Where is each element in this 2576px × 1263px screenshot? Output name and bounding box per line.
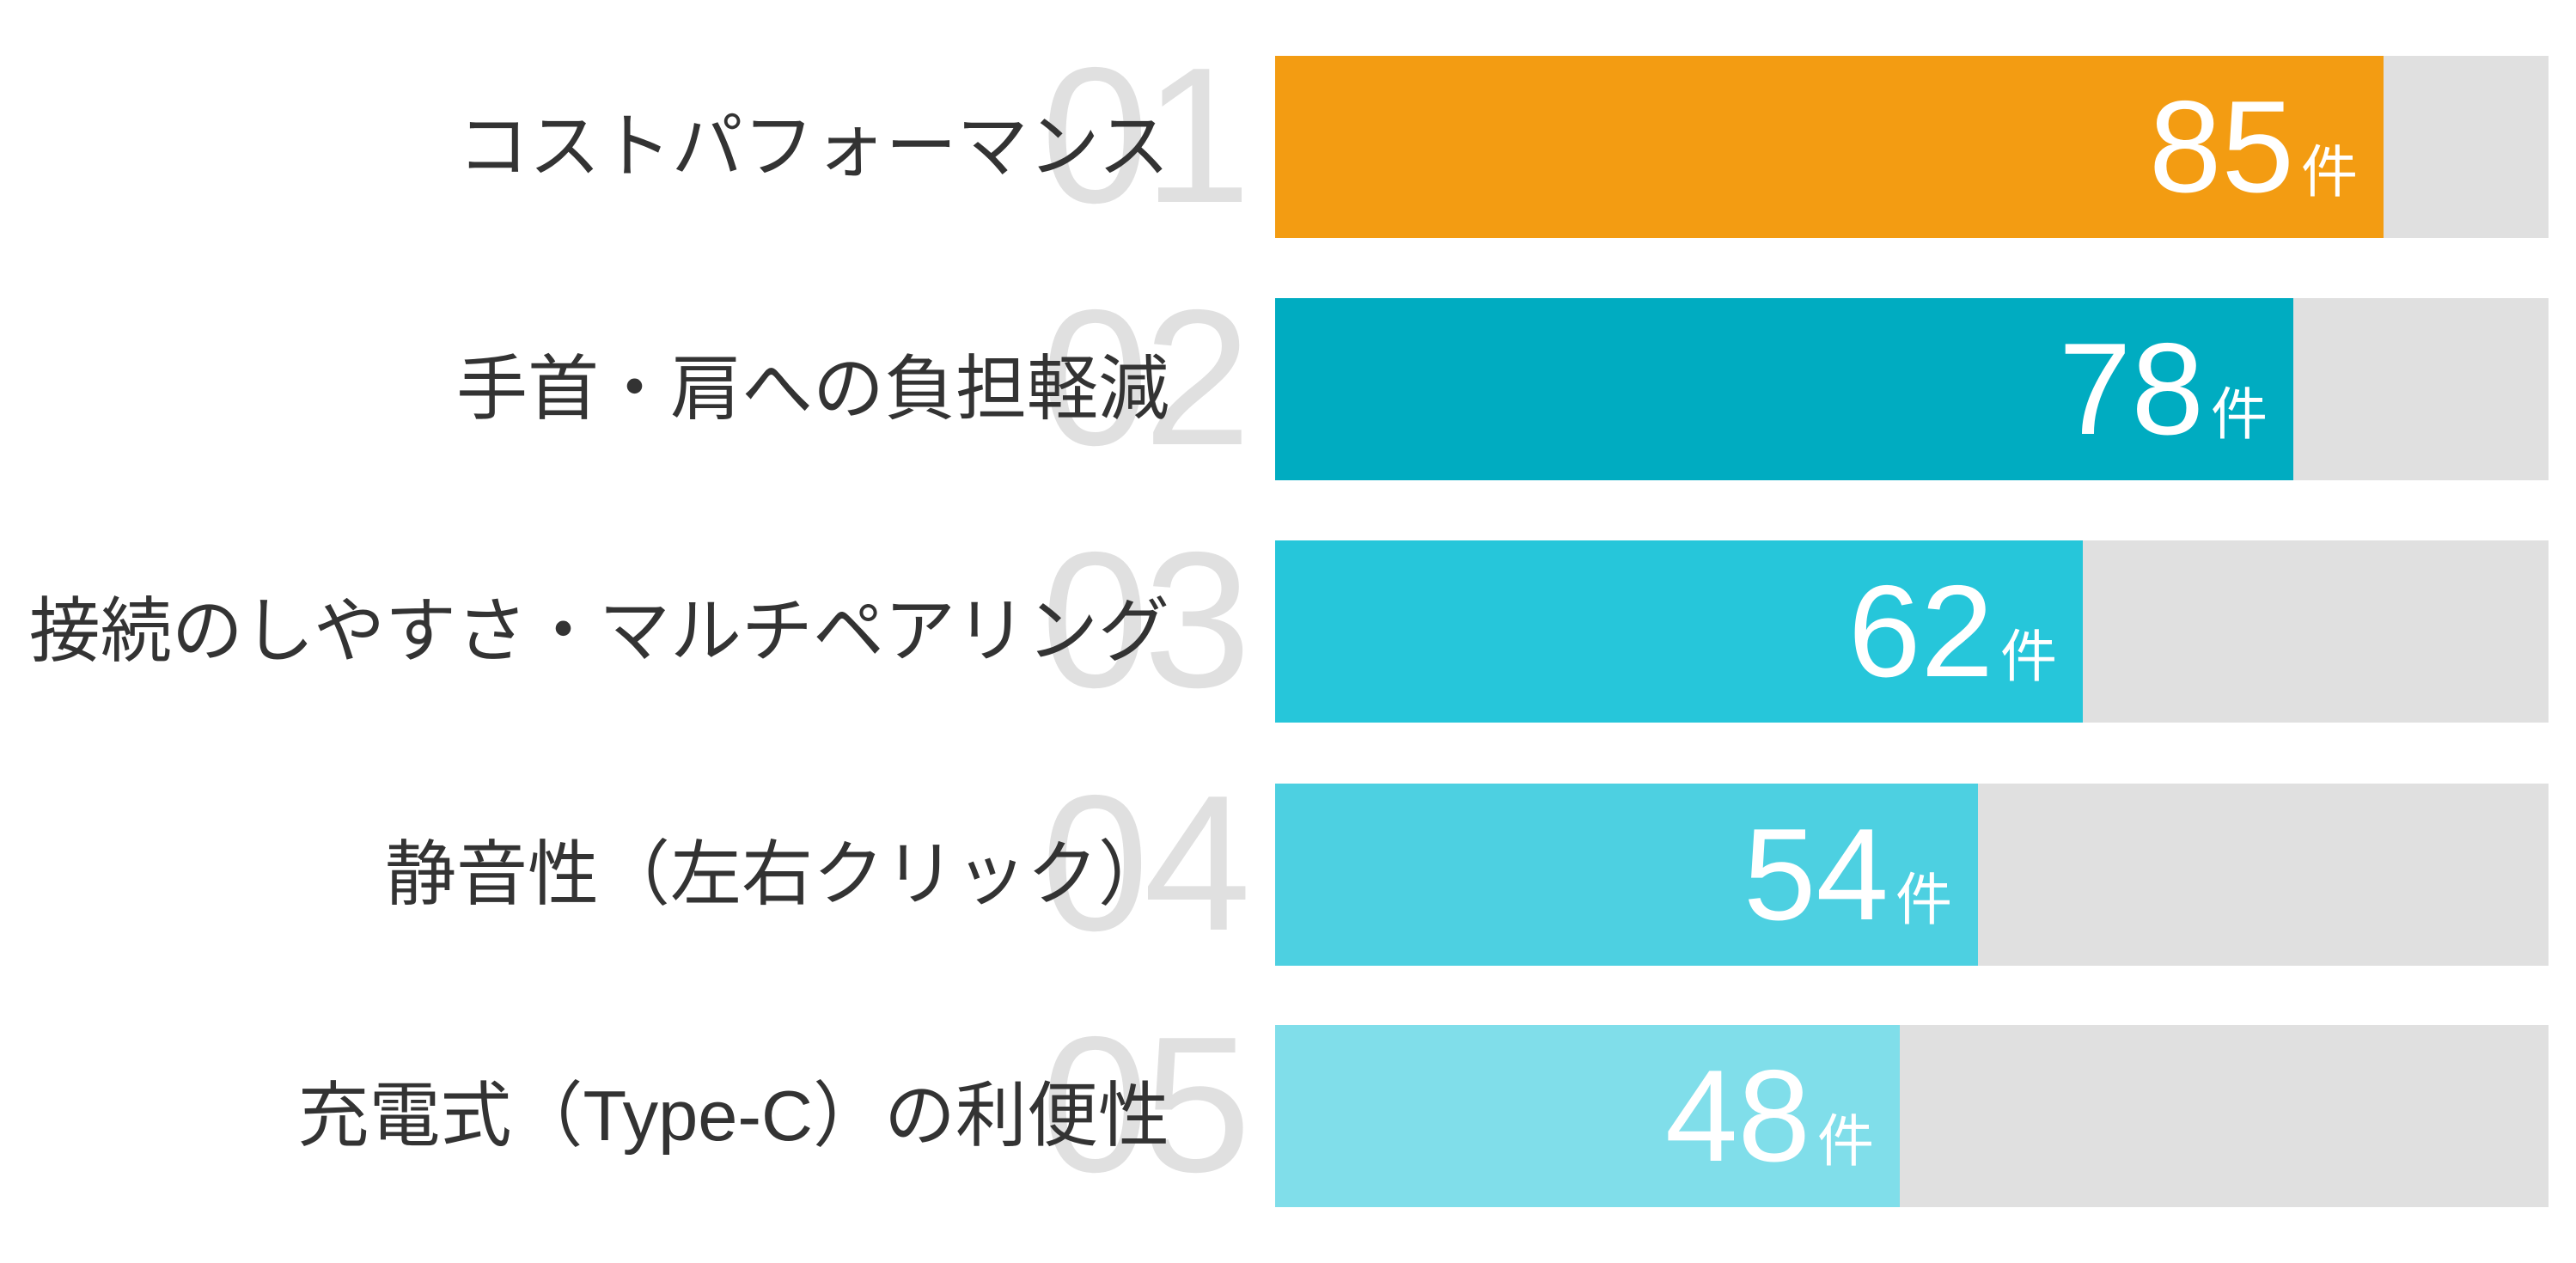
row 3: connectivity — [29, 511, 2549, 728]
bar 54: 54件 — [1743, 802, 1952, 948]
label: 手首・肩への負担軽減 — [456, 349, 1169, 429]
bar 54 — [1275, 784, 2549, 966]
label: 接続のしやすさ・マルチペアリング — [29, 591, 1169, 671]
bar 78 — [1275, 298, 2549, 480]
rank number 01: 01 — [1041, 27, 1246, 243]
label: コストパフォーマンス — [458, 107, 1169, 186]
rank number 04: 04 — [1041, 754, 1246, 971]
bar 62 — [1275, 540, 2549, 723]
row 5: rechargeable — [297, 996, 2549, 1212]
label: 充電式（Type-C）の利便性 — [297, 1076, 1169, 1156]
bar 48: 48件 — [1665, 1043, 1874, 1189]
rank number 02: 02 — [1041, 269, 1246, 485]
row 4: quiet — [385, 754, 2549, 971]
bar 85 — [1275, 56, 2549, 238]
bar 78: 78件 — [2059, 316, 2268, 462]
rank number 03: 03 — [1041, 511, 1246, 728]
bar 48 — [1275, 1025, 2549, 1207]
row 1: cost performance — [458, 27, 2549, 243]
bar 62: 62件 — [1848, 558, 2057, 705]
rank number 05: 05 — [1041, 996, 1246, 1212]
label: 静音性（左右クリック） — [385, 834, 1169, 914]
bar 85: 85件 — [2149, 74, 2358, 220]
row 2: wrist/shoulder — [456, 269, 2549, 485]
